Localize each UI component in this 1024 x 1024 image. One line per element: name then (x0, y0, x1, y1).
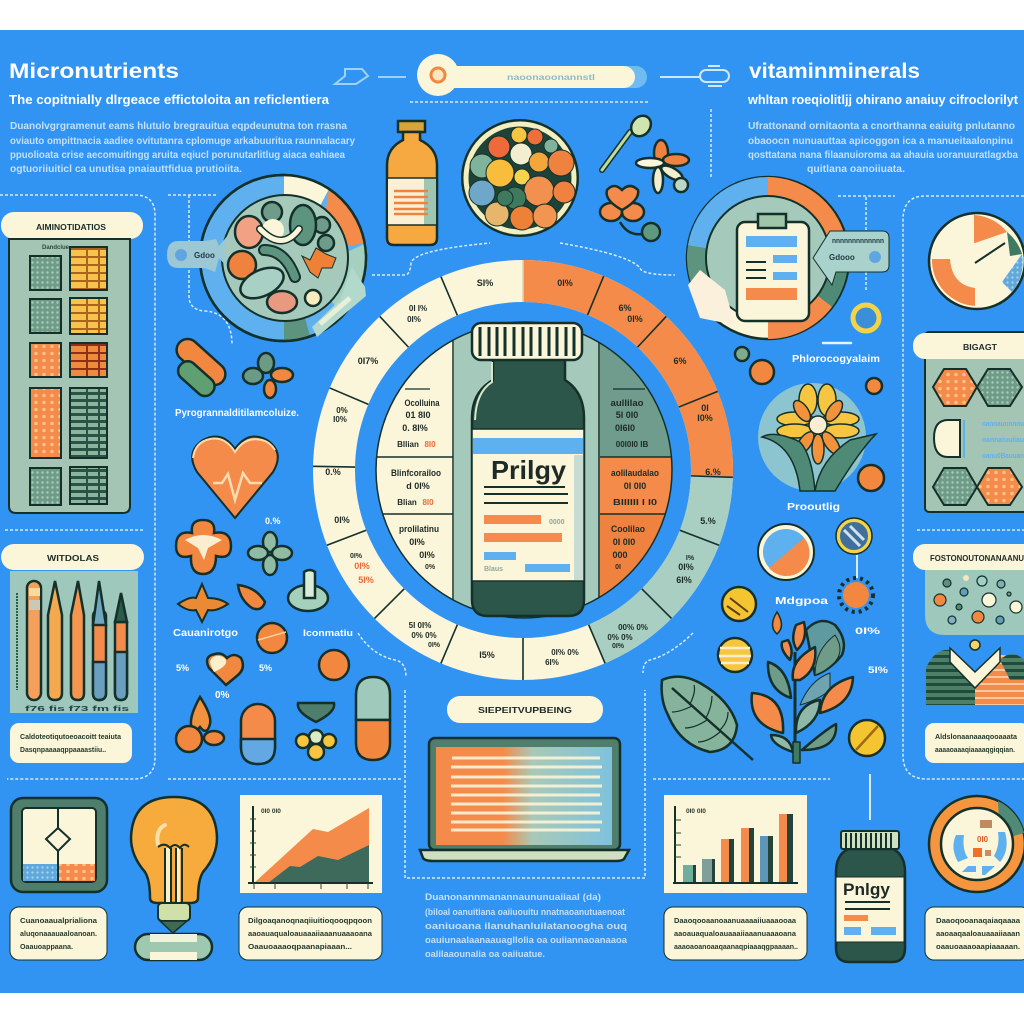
label: percent: 0I% (855, 626, 880, 636)
paragraph: right intro: obaoocn nunuauttaa apicoggon ica a manueitaalonpinu (748, 136, 1013, 147)
ring labels: I0% (697, 413, 713, 423)
left panel: bars pill heading: WITDOLAS (47, 553, 99, 563)
ring labels: 0I (701, 403, 709, 413)
left inner labels (391, 398, 441, 571)
main bottle (472, 323, 584, 616)
chart: bar chart: 0I0 0I0 (686, 808, 706, 815)
caption: right panel (925, 723, 1024, 763)
center: body paragraph: oaniuoana ilanuhanluilatanoogha ouq (425, 921, 627, 932)
left inner labels: Blian (397, 498, 417, 507)
ring labels: 0I% (428, 642, 441, 649)
left panel: pencil bar chart: f76 fis f73 fm fis (25, 706, 129, 713)
center: body paragraph: oauiunaalaanaauagllolia oa ouiiannaoanaaoa (425, 935, 628, 946)
center: body paragraph: oalilaaounalia oa oaiiuatue. (425, 949, 545, 960)
ring labels: 0I% (678, 562, 694, 572)
icon: circular dial: 0I0 (977, 835, 989, 844)
right panel: hexagon chart: oannaiuuiiau (982, 437, 1024, 444)
caption: dial: aaoaaqaaloauaaaiiaaan (936, 929, 1020, 938)
small bottle label text: Pnlgy (843, 880, 891, 899)
label: percent: 5% (259, 663, 272, 673)
caption: dial: Daaoqooanaqaiaqaaaa (936, 916, 1021, 925)
paragraph: left intro: oviauto ompittnacia aadiee ovitutanra cplomuge arkabuuritua raunnalacary (10, 136, 355, 147)
ring labels: 0I I% (409, 304, 427, 313)
bottle label: Blaus (484, 566, 503, 573)
ring labels (325, 278, 721, 667)
caption: bar chart: aaaoaoanoaaqaanaqpiaaaqgpaaaan.. (674, 942, 798, 951)
icon: orange bottle (387, 121, 437, 245)
top center header bar (335, 54, 729, 96)
label: mdgpoa: Mdgpoa (775, 596, 829, 607)
label: iconmatiu: Iconmatiu (303, 628, 353, 638)
chart: right pie (929, 213, 1024, 309)
left panel: caption: Caldoteotiqutoeoacoitt teaiuta (20, 732, 122, 741)
ring labels: 5I% (358, 575, 374, 585)
right panel: pill heading (913, 333, 1024, 359)
label: cauanirotgo: Cauanirotgo (173, 628, 238, 639)
icon: four-leaf flower (243, 353, 293, 398)
chart: chevron bars (926, 648, 1024, 705)
right inner labels: 0I 0I0 (624, 481, 646, 491)
icon: fruit bowl (462, 120, 578, 236)
ring labels: 0I% 0% (551, 648, 579, 657)
caption: right panel: Aldslonaanaaaqooaaata (935, 732, 1018, 741)
icon: capsules (172, 334, 230, 400)
center: body paragraph: (biloal oanuitiana oaiiuouitu nnatnaoanutuaenoat (425, 907, 626, 918)
caption: dial (925, 907, 1024, 960)
icon: droplets (176, 697, 224, 752)
subtitle: right: whltan roeqiolitljj ohirano anaiuy cifroclorilyt (747, 93, 1019, 107)
icon: orange tablet (257, 623, 287, 653)
ring labels: 0% 0% (411, 631, 437, 640)
right panel: hexagon chart (913, 332, 1024, 512)
caption: diagram (10, 907, 107, 960)
center: body paragraph: Duanonannmanannaununuaiiaal (da) (425, 892, 601, 903)
tag: right ring: Gdooo (829, 253, 855, 262)
icon: leaf (662, 677, 753, 760)
icon: orange circle (319, 650, 349, 680)
icon: green mushroom (288, 570, 328, 611)
caption: diagram: aluqonaaauaaloanoan. (20, 929, 97, 938)
right inner labels: 5I 0I0 (616, 410, 638, 420)
right inner labels: 0I6I0 (615, 423, 635, 433)
dashed panel connectors (0, 102, 1024, 878)
left inner labels: 0% (425, 564, 436, 571)
caption: bar chart (664, 907, 807, 960)
center: pill heading (447, 696, 603, 723)
icon: green clover (248, 532, 292, 575)
tag: right ring (813, 231, 889, 285)
left panel: table pill heading (1, 212, 143, 239)
chart: left nutrient ring plate (167, 175, 367, 341)
bottle label: 0000 (549, 519, 565, 526)
icon: plant (752, 621, 853, 763)
icon: leaf with berries (296, 703, 336, 760)
tag: left ring (167, 235, 228, 272)
left panel: pencil bar chart (10, 571, 138, 713)
paragraph: left intro: ppuolioata crise aecomuitingg aruita eqiucl porunutarlitlug aiaca eahiaea (10, 150, 345, 161)
center: body paragraph (425, 892, 628, 960)
icon: heart (192, 437, 278, 518)
ring labels: 6I% (545, 658, 559, 667)
right panel: dot cluster (925, 570, 1024, 635)
ring labels: I% (686, 555, 695, 562)
paragraph: right intro: Ufrattonand ornitaonta a cnorthanna eaiuitg pnlutanno (748, 121, 1015, 132)
label: percent: 5I% (868, 665, 888, 675)
label: percent: 5% (176, 663, 189, 673)
ring labels: 0I% (407, 315, 421, 324)
left inner labels: Bllian (397, 440, 419, 449)
icon: striped ring tablet (836, 518, 872, 554)
paragraph: right intro: quitlana oanoiiuata. (807, 164, 905, 175)
icon: small tablets (735, 347, 884, 491)
icon: petal flower (636, 140, 689, 193)
icon: small Priligy bottle (836, 831, 905, 962)
arrow: to label (823, 342, 851, 344)
connector: to small bottle (869, 774, 871, 820)
ring labels: I5% (479, 650, 495, 660)
left inner labels: d 0I% (406, 481, 430, 491)
right inner labels: 0I 0I0 (613, 537, 635, 547)
left panel: swatch grid (9, 239, 130, 513)
chart: area chart: 0I0 0I0 (261, 808, 281, 815)
paragraph: right intro: qosttatana nana filaanuioroma aa ahauia uoranuuratlagxba (748, 150, 1018, 161)
chart: bar chart (664, 795, 807, 893)
right inner labels (610, 398, 659, 571)
caption: diagram: Oaauoappaana. (20, 942, 73, 951)
icon: circular dial (929, 796, 1024, 892)
caption: bar chart: aaoauaqualoauaaaiiaaanuaaaoana (674, 929, 797, 938)
caption: area chart (239, 907, 382, 960)
caption: right panel: aaaaoaaaqiaaaaqgiqqian. (935, 745, 1015, 754)
icon: yellow tablets (718, 587, 885, 756)
ring labels: 00% 0% (618, 623, 648, 632)
icon: sun (839, 578, 873, 612)
paragraph: left intro: ogtuoriiuiticl ca unutisa pnaiauttfidua prutioiita. (10, 164, 242, 175)
ring labels: 0% (336, 406, 348, 415)
title: vitaminminerals: vitaminminerals (749, 60, 920, 83)
icon: small seed (970, 640, 980, 650)
icon: seed (238, 585, 265, 609)
icon: ring (853, 305, 879, 331)
subtitle: left: The copitnially dlrgeace effictoloita an reficlentiera (9, 93, 330, 107)
icon: orange cross flower (176, 520, 231, 574)
caption: bar chart: Daaoqooaanoaanuaaaaiiuaaaooaa (674, 916, 797, 925)
ring labels: 0I7% (358, 356, 378, 366)
icon: sunflower (758, 383, 876, 491)
center: laptop (420, 738, 629, 861)
ring labels: 0I% (612, 643, 625, 650)
label: percent: 0.% (265, 516, 281, 526)
label: left icons: Pyrogrannalditilamcoluize. (175, 408, 299, 419)
paragraph: left intro (10, 121, 355, 175)
central ring chart (313, 260, 733, 680)
right inner labels: Coolilao (611, 524, 645, 534)
bottle label title: Prilgy (491, 455, 567, 485)
banner on plate (312, 267, 366, 337)
icon: framed diamond diagram (11, 798, 107, 892)
icon: light bulb (131, 797, 217, 960)
left panel: caption (10, 723, 132, 763)
right panel: pill heading: BIGAGT (963, 342, 998, 352)
left inner labels: Blinfcorailoo (391, 468, 441, 478)
central disc with info panels (370, 320, 680, 620)
ring labels: 6% (673, 356, 687, 366)
caption: area chart: aaoauaqualoauaaaiiaaanuaaaoana (248, 929, 373, 938)
ring labels: 6I% (676, 575, 692, 585)
icon: spoon (602, 112, 655, 170)
caption: diagram: Cuanoaaualprialiona (20, 916, 98, 925)
paragraph: right intro (748, 121, 1018, 175)
right panel: long pill heading (913, 544, 1024, 570)
right inner labels: aolilaudalao (611, 468, 659, 478)
icon: half disc (758, 524, 814, 580)
ring labels: 0.% (325, 467, 341, 477)
connector: tablet to sun (856, 555, 858, 578)
left panel: caption: Dasqnpaaaaqppaaaastiiu.. (20, 745, 106, 754)
ring labels: 0% 0% (607, 633, 633, 642)
right inner labels: 00I0I0 IB (616, 440, 648, 449)
icon: clover with stem (600, 186, 660, 241)
right inner labels: 000 (612, 550, 628, 560)
icon: half capsule (241, 704, 275, 764)
label: prooutlig: Prooutlig (787, 502, 840, 513)
top center header bar: naoonaoonannstl (507, 73, 595, 82)
label: percent: 0% (215, 690, 230, 701)
right inner labels: 0I (615, 564, 621, 571)
paragraph: left intro: Duanolvgrgramenut eams hlutulo bregrauitua eqpdeunutna ton rrasna (10, 121, 347, 132)
left inner labels: 0I% (419, 550, 435, 560)
caption: area chart: Dilgoaqanoqnaqiiuitioqooqpqoon (248, 916, 372, 925)
right inner labels: aullilao (610, 398, 644, 408)
ring labels: I0% (333, 415, 347, 424)
bottle label (472, 429, 584, 581)
ring labels: 0I% (627, 314, 643, 324)
tag: right ring: nnnnnnnnnnnnn (832, 238, 884, 245)
chart: right ring with clipboard (687, 177, 889, 339)
center: pill heading: SIEPEITVUPBEING (478, 705, 572, 715)
right inner labels: BIIIIII I I0 (613, 498, 658, 507)
title: micronutrients: Micronutrients (9, 60, 179, 83)
icon: spice star (178, 584, 228, 622)
left inner labels: prolilatinu (399, 524, 439, 534)
left inner labels: 8I0 (424, 440, 436, 449)
ring labels: 0I% (334, 515, 350, 525)
ring labels: 0I% (557, 278, 573, 288)
left inner labels: 01 8I0 (405, 410, 431, 420)
clipboard (737, 214, 809, 321)
label: phloroxygalate: Phlorocogyalaim (792, 354, 880, 365)
left inner labels: 0I% (409, 537, 425, 547)
icon: small heart (207, 654, 243, 685)
tag: left ring: Gdoo (194, 251, 215, 260)
left inner labels: 0. 8I% (402, 423, 428, 433)
ring labels: 5.% (700, 516, 716, 526)
left panel: table pill heading: AIMINOTIDATIOS (36, 223, 107, 232)
ring labels: 6% (618, 303, 632, 313)
icon: tiny seed (772, 612, 782, 634)
left panel: bars pill heading (1, 544, 144, 570)
left inner labels: Ocolluina (404, 398, 440, 408)
chart: area chart (240, 795, 382, 893)
ring labels: SI% (477, 278, 493, 288)
left panel: swatch grid: Dandclue (42, 245, 70, 251)
caption: area chart: Oaauoaaaoqpaanapiaaan... (248, 942, 352, 951)
caption: dial: oaauoaaaoaapiaaaaan. (936, 942, 1020, 951)
left inner labels: 8I0 (422, 498, 434, 507)
icon: large capsule (356, 677, 390, 760)
ring labels: 5I 0I% (409, 621, 431, 630)
ring labels: 6.% (705, 467, 721, 477)
ring labels: 0I% (354, 561, 370, 571)
ring labels: 0I% (350, 553, 363, 560)
